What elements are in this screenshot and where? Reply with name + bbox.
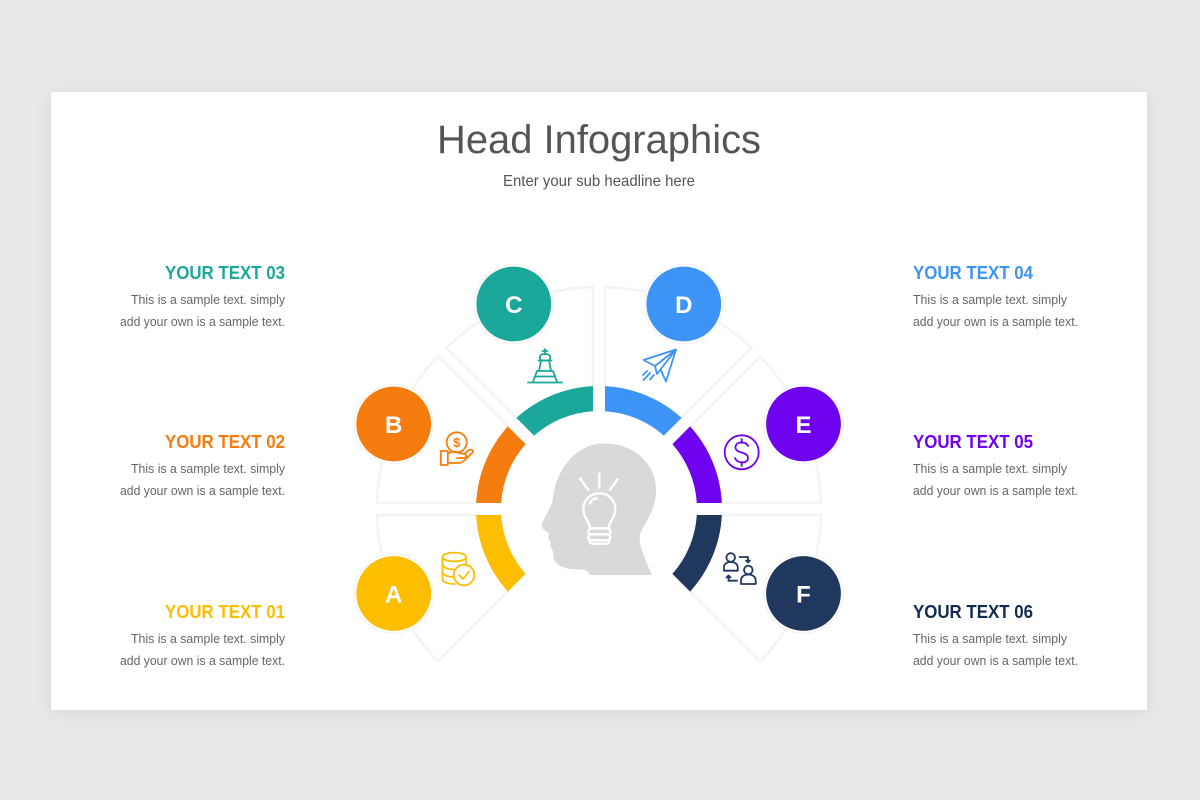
text block 02: YOUR TEXT 02: [165, 432, 285, 452]
text block 01: YOUR TEXT 01: [165, 602, 285, 622]
text block 02: [120, 432, 286, 498]
text block 06: This is a sample text. simply: [913, 632, 1068, 646]
circle badge A: A: [385, 582, 402, 608]
ring segment C: [516, 386, 593, 436]
ring segment D: [605, 386, 682, 436]
icon: database check: [442, 553, 474, 585]
circle badge E: E: [795, 412, 812, 439]
text block 04: [913, 263, 1078, 329]
icon: dollar coin: [725, 435, 759, 469]
circle badge F: F: [796, 582, 811, 608]
text block 06: YOUR TEXT 06: [913, 602, 1033, 622]
text block 03: YOUR TEXT 03: [165, 263, 285, 283]
icon: head with light bulb: [542, 443, 656, 575]
panel: white slide card: [51, 92, 1147, 710]
text block 05: add your own is a sample text.: [913, 484, 1078, 498]
circle badge B: [354, 384, 433, 464]
ring segment B: [476, 426, 526, 503]
ring segment A: [476, 515, 526, 592]
text block 02: add your own is a sample text.: [120, 484, 285, 498]
icon: hand holding coin: [441, 432, 473, 465]
circle badge D: [644, 264, 723, 344]
text block 05: This is a sample text. simply: [913, 462, 1068, 476]
text block 03: add your own is a sample text.: [120, 315, 285, 329]
circle badge B: B: [385, 412, 402, 439]
text block 06: [913, 602, 1078, 668]
text block 01: This is a sample text. simply: [131, 632, 286, 646]
text block 04: YOUR TEXT 04: [913, 263, 1033, 283]
text block 01: [120, 602, 286, 668]
circle badge C: C: [505, 292, 522, 319]
text block 02: This is a sample text. simply: [131, 462, 286, 476]
icon: chess king: [528, 349, 562, 382]
text block 05: [913, 432, 1078, 498]
circle badge E: [764, 384, 843, 464]
circle badge A: [354, 554, 433, 633]
sector outlines: [377, 287, 821, 662]
subtitle: Enter your sub headline here: [503, 173, 695, 190]
circle badge F: [764, 554, 843, 633]
circle badge D: D: [675, 292, 692, 319]
text block 06: add your own is a sample text.: [913, 654, 1078, 668]
icon: users exchange: [724, 553, 756, 584]
text block 04: add your own is a sample text.: [913, 315, 1078, 329]
ring segment E: [672, 426, 722, 503]
ring segment F: [672, 515, 722, 592]
icon: paper plane: [643, 350, 676, 382]
title: Head Infographics: [437, 118, 761, 162]
text block 05: YOUR TEXT 05: [913, 432, 1033, 452]
text block 04: This is a sample text. simply: [913, 293, 1068, 307]
text block 03: This is a sample text. simply: [131, 293, 286, 307]
text block 01: add your own is a sample text.: [120, 654, 285, 668]
circle badge C: [474, 264, 553, 344]
text block 03: [120, 263, 286, 329]
icon: hand holding coin: $: [453, 435, 461, 450]
